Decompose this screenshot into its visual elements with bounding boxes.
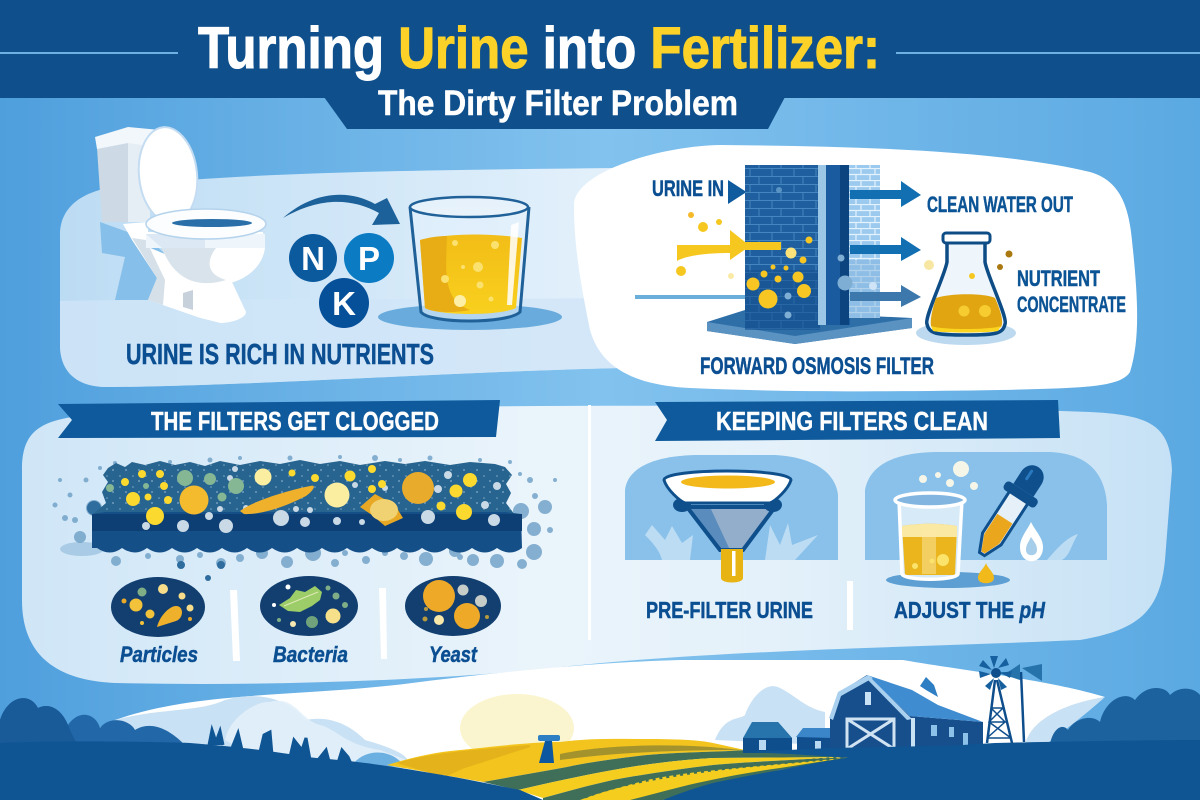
left trees xyxy=(0,698,185,745)
label: urine in: URINE IN xyxy=(652,176,724,201)
icon: glass of urine xyxy=(378,197,562,330)
illustration: pre-filter funnel xyxy=(625,455,838,582)
separator: bacteria and yeast xyxy=(379,588,387,659)
arrow: middle output xyxy=(850,237,921,261)
title: Turning Urine into Fertilizer: xyxy=(198,16,880,81)
wheat field: lower green xyxy=(543,757,853,800)
label: bacteria: Bacteria xyxy=(273,642,348,667)
separator: particles and bacteria xyxy=(230,590,240,661)
header band xyxy=(0,0,1200,129)
right hill xyxy=(663,740,1200,800)
icon: P nutrient: P xyxy=(358,240,380,277)
left hill xyxy=(0,741,543,800)
figure in field xyxy=(538,735,560,763)
banner: keeping filters clean xyxy=(655,400,1060,441)
label: urine is rich in nutrients: URINE IS RICH IN NUTRIENTS xyxy=(126,339,434,371)
arrow: clean water out xyxy=(850,181,921,207)
label: nutrient concentrate xyxy=(1017,266,1126,317)
label: particles: Particles xyxy=(120,642,198,667)
illustration: clogged membrane xyxy=(52,455,557,581)
icon: K nutrient: K xyxy=(332,285,356,322)
wheat field: upper xyxy=(387,739,745,782)
label: adjust the pH: ADJUST THE pH xyxy=(894,597,1045,623)
illustration: farm landscape xyxy=(0,656,1200,800)
panel: forward osmosis xyxy=(574,145,1137,391)
barn xyxy=(829,675,983,750)
icon: K nutrient xyxy=(319,278,369,328)
small building right xyxy=(796,728,832,753)
wheat field: middle yellow xyxy=(518,757,853,798)
banner: the filters get clogged xyxy=(58,400,500,438)
arrow: urine in xyxy=(728,180,745,204)
windmill xyxy=(979,656,1042,743)
arrow: lower output xyxy=(850,285,921,307)
icon: toilet xyxy=(95,124,266,323)
grass tufts xyxy=(209,730,352,766)
label: nutrient concentrate: CONCENTRATE xyxy=(1017,292,1126,317)
divider xyxy=(588,405,591,640)
arrow: urine flow xyxy=(676,212,781,279)
banner: the filters get clogged: THE FILTERS GET CLOGGED xyxy=(151,406,439,436)
panel: lower section xyxy=(22,406,1172,684)
label: nutrient concentrate: NUTRIENT xyxy=(1017,266,1100,291)
small blue hill xyxy=(352,752,405,767)
label: clean water out: CLEAN WATER OUT xyxy=(927,192,1073,217)
icon: filter membrane xyxy=(707,165,912,344)
illustration: adjust pH xyxy=(865,452,1107,588)
icon: P nutrient xyxy=(344,233,394,283)
icon: N nutrient: N xyxy=(301,240,325,277)
sky xyxy=(0,660,1105,800)
label: pre-filter urine: PRE-FILTER URINE xyxy=(646,597,813,623)
small building left xyxy=(743,722,792,753)
subtitle: The Dirty Filter Problem xyxy=(378,84,738,123)
wheat field: lower yellow xyxy=(580,757,853,800)
separator: clean methods xyxy=(847,581,853,630)
sun xyxy=(460,694,574,762)
wheat field: green band xyxy=(483,750,853,790)
icon: particles xyxy=(111,577,205,637)
panel: urine is rich in nutrients xyxy=(60,124,620,387)
icon: flask xyxy=(916,233,1016,345)
label: yeast: Yeast xyxy=(429,642,478,667)
label: forward osmosis filter: FORWARD OSMOSIS FILTER xyxy=(700,353,934,380)
icon: bacteria xyxy=(260,576,358,636)
arrow: toilet to glass xyxy=(283,195,400,225)
icon: yeast xyxy=(405,576,501,636)
right trees xyxy=(1050,688,1200,745)
banner: keeping filters clean: KEEPING FILTERS CLEAN xyxy=(716,406,988,436)
icon: N nutrient xyxy=(289,234,337,282)
